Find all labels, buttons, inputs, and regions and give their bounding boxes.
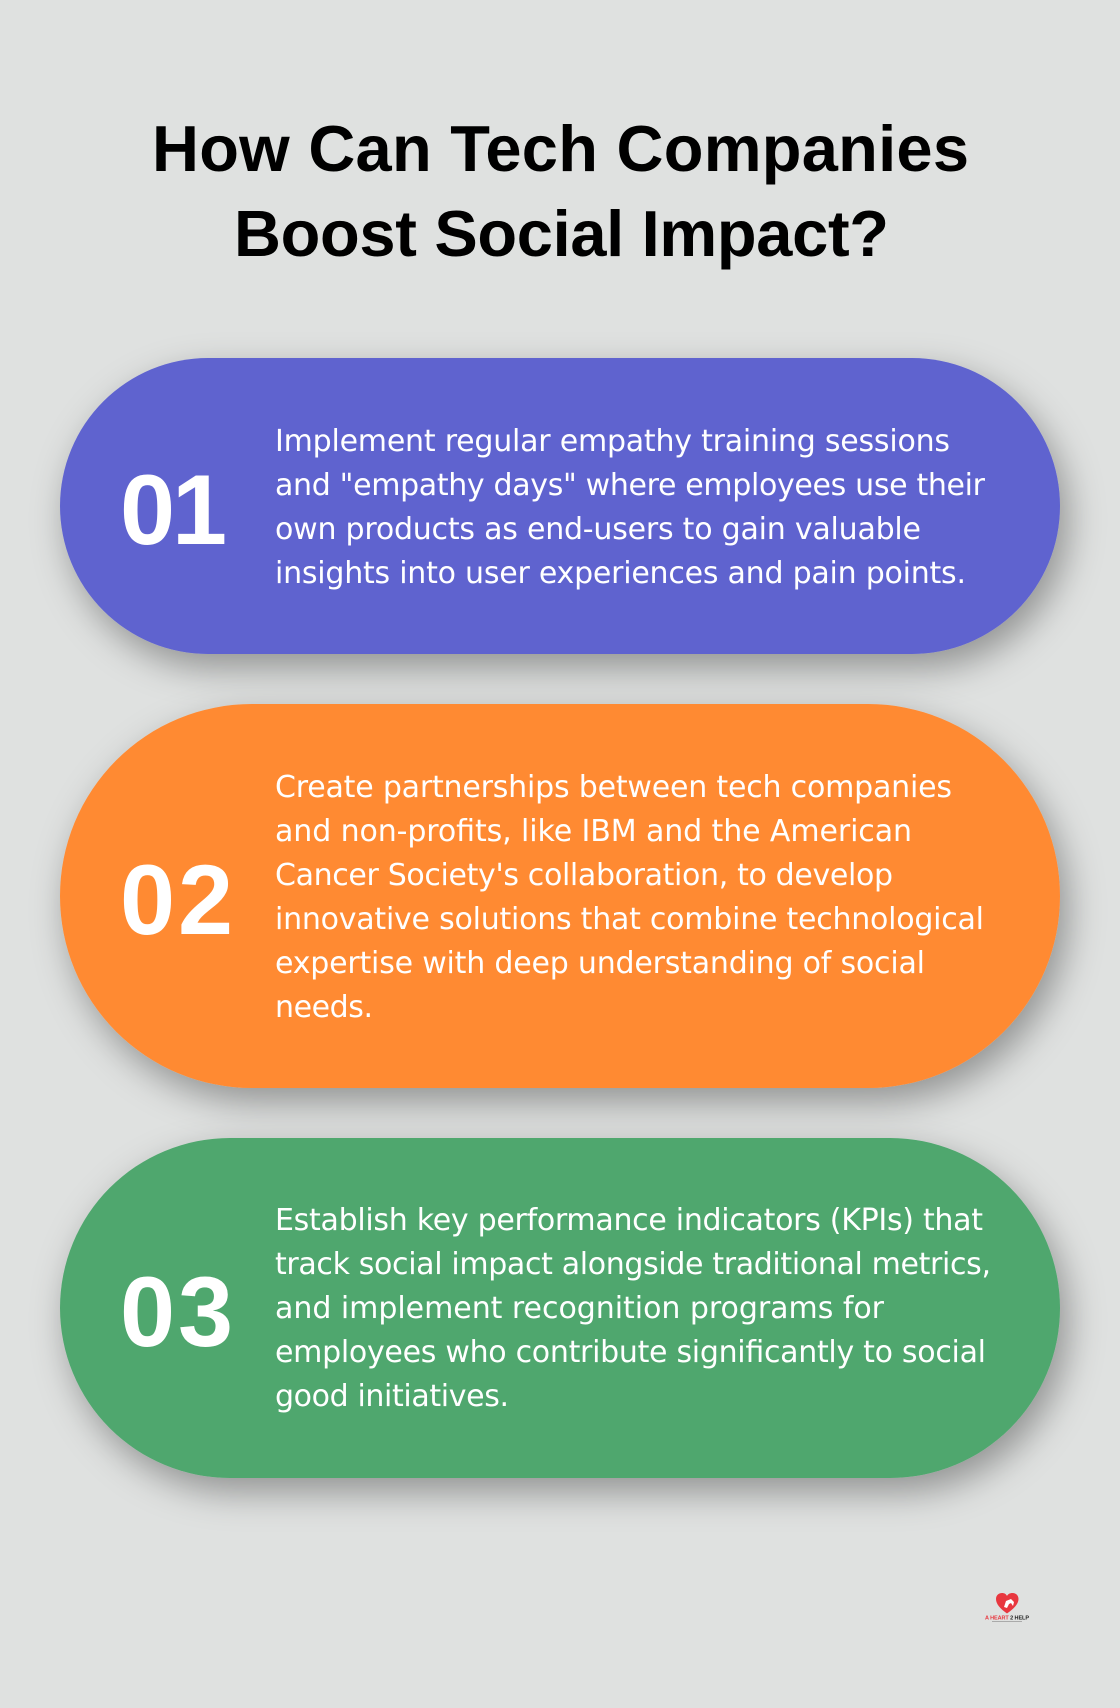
step 01 text: insights into user experiences and pain points. (275, 556, 966, 591)
step 02 text: Create partnerships between tech companies (275, 770, 952, 805)
logo wordmark: A HEART 2 HELP (985, 1616, 1029, 1622)
step 02 text: innovative solutions that combine technological (275, 902, 984, 937)
step 01 text: and "empathy days" where employees use their (275, 468, 986, 503)
step 03 text: track social impact alongside traditional metrics, (275, 1247, 991, 1282)
step 01 text: Implement regular empathy training sessions (275, 424, 950, 459)
step 02 text (275, 770, 984, 1025)
step 02 text: and non-profits, like IBM and the American (275, 814, 912, 849)
icon: heart with hand (996, 1593, 1018, 1614)
step 02 text: Cancer Society's collaboration, to develop (275, 858, 893, 893)
step number 03: 03 (120, 1256, 233, 1367)
step 03 text: employees who contribute significantly to social (275, 1335, 986, 1370)
step number 01: 01 (120, 454, 227, 565)
title: Boost Social Impact? (234, 197, 889, 270)
step 03 text: good initiatives. (275, 1379, 509, 1414)
step 03 text (275, 1203, 991, 1414)
step 01 text: own products as end-users to gain valuable (275, 512, 921, 547)
step 03 text: Establish key performance indicators (KPIs) that (275, 1203, 983, 1238)
step 02 text: expertise with deep understanding of social (275, 946, 925, 981)
logo: A Heart 2 Help (985, 1593, 1029, 1622)
step 01 text (275, 424, 986, 591)
step 02 text: needs. (275, 990, 373, 1025)
panel: step 02 (60, 704, 1060, 1088)
step 03 text: and implement recognition programs for (275, 1291, 885, 1326)
title (152, 112, 969, 270)
panel: step 01 (60, 358, 1060, 654)
title: How Can Tech Companies (152, 112, 969, 185)
step number 02: 02 (120, 844, 233, 955)
panel: step 03 (60, 1138, 1060, 1478)
